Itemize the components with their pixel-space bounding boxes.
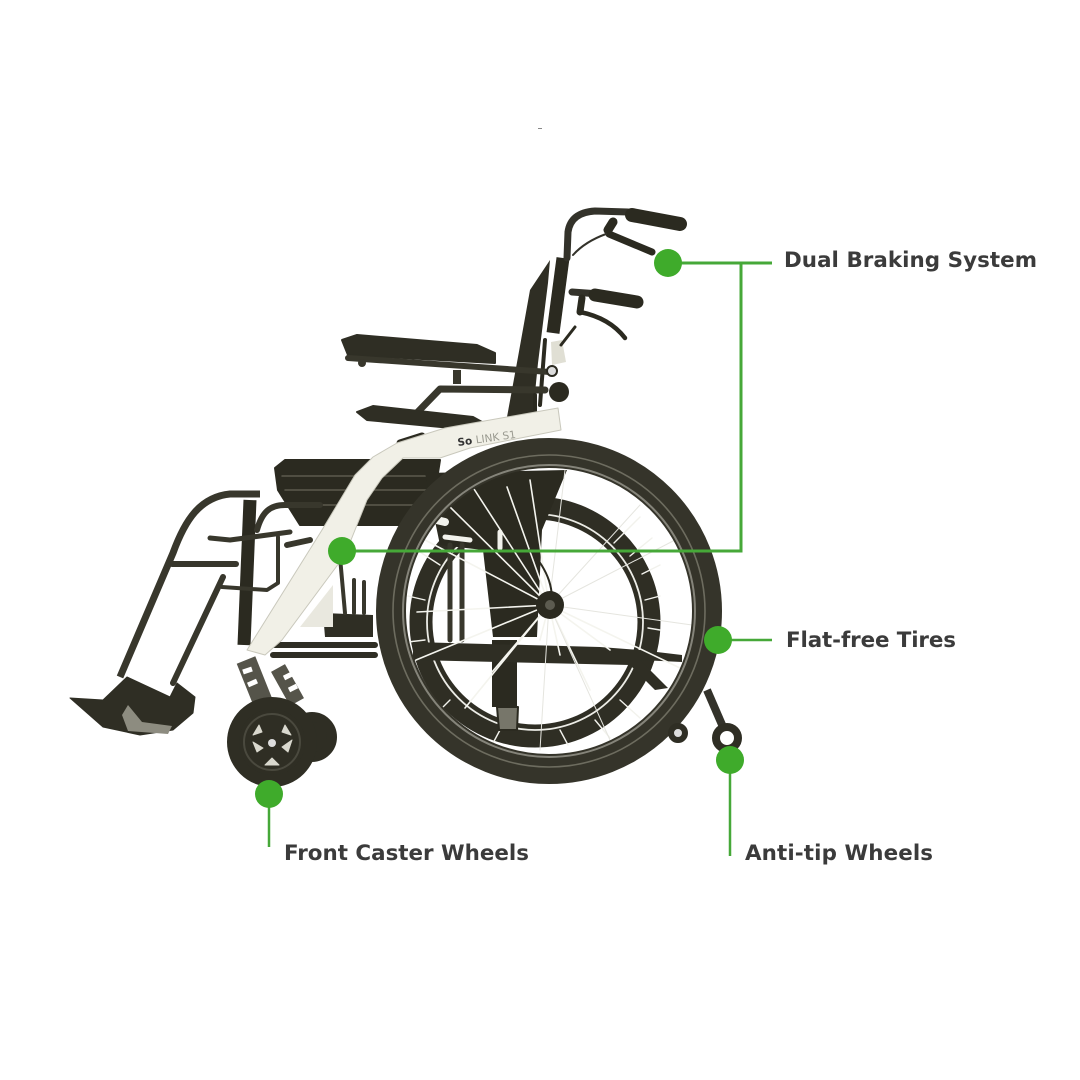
callout: flat-free tires: Flat-free Tires: [786, 628, 956, 653]
callout: anti-tip wheels: Anti-tip Wheels: [745, 841, 933, 866]
bottom rail: [413, 642, 682, 690]
under-seat dark structure: [425, 470, 567, 640]
left frame rail: [273, 557, 375, 655]
front caster wheels: [233, 660, 332, 781]
wheelchair illustration: [70, 211, 738, 781]
armrest upper: [342, 335, 495, 363]
brand label: So LINK S1: [457, 429, 517, 449]
main rear wheel: [391, 453, 707, 769]
callout: dual braking system: Dual Braking System: [784, 248, 1037, 273]
callout: anti-tip wheels: [716, 746, 933, 866]
backrest: [507, 260, 550, 417]
leg strap and buckle: [492, 640, 518, 730]
push handle upper: [567, 211, 680, 258]
rear far wheel: [408, 508, 660, 745]
leg rest: [70, 494, 320, 735]
seat cushion: [275, 460, 440, 525]
armrest lower: [357, 406, 482, 430]
back post: [553, 258, 563, 333]
callout: flat-free tires: [704, 626, 956, 654]
white frame: [247, 408, 561, 655]
push handle lower: [572, 292, 637, 338]
callout: front caster wheels: Front Caster Wheels: [284, 841, 529, 866]
anti-tip wheel: [671, 690, 738, 749]
callout: dual braking system: [328, 248, 1037, 565]
callout: front caster wheels: [255, 780, 529, 866]
